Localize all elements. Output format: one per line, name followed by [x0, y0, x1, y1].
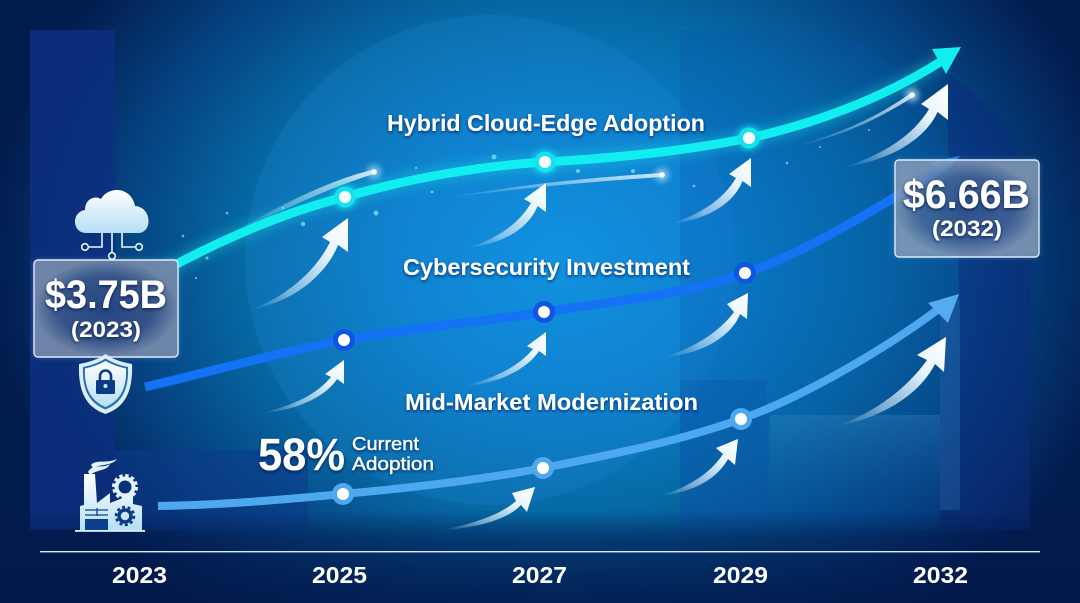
callout: 2023 value: $3.75B: [45, 273, 167, 317]
stat: 58% current adoption: [258, 429, 434, 480]
callout: 2032 value: [895, 160, 1039, 257]
timeline axis: [40, 551, 1040, 588]
line: hybrid cloud-edge: [160, 47, 961, 273]
stat: 58% current adoption: 58%: [258, 429, 345, 480]
year labels: 2023: [112, 562, 167, 588]
growth arrows: [250, 84, 948, 530]
stat: 58% current adoption: Current: [352, 434, 419, 454]
line: cybersecurity: [145, 156, 960, 387]
icon: factory: [75, 459, 145, 532]
year labels: 2027: [512, 562, 567, 588]
heading: hybrid: Hybrid Cloud-Edge Adoption: [387, 110, 705, 136]
year labels: 2025: [312, 562, 367, 588]
callout: 2023 value: [34, 260, 178, 357]
callout: 2032 value: $6.66B: [903, 173, 1030, 217]
year labels: [112, 562, 968, 588]
year labels: 2029: [713, 562, 768, 588]
background ghost shapes: [30, 15, 1030, 530]
heading: mid-market: Mid-Market Modernization: [405, 389, 698, 415]
line: mid-market: [158, 294, 959, 506]
year labels: 2032: [913, 562, 968, 588]
arrowhead: [932, 47, 961, 74]
heading: cybersecurity: Cybersecurity Investment: [403, 254, 690, 280]
icon: cloud: [75, 190, 149, 259]
stat: 58% current adoption: Adoption: [352, 454, 434, 474]
icon: shield: [79, 354, 132, 414]
callout: 2032 value: (2032): [932, 216, 1002, 241]
sparkle trails: [182, 88, 919, 279]
bottom shading: [0, 510, 1080, 603]
arrowhead: [928, 294, 959, 323]
callout: 2023 value: (2023): [71, 317, 141, 342]
arrowhead: [930, 156, 960, 174]
nodes: [332, 125, 762, 505]
